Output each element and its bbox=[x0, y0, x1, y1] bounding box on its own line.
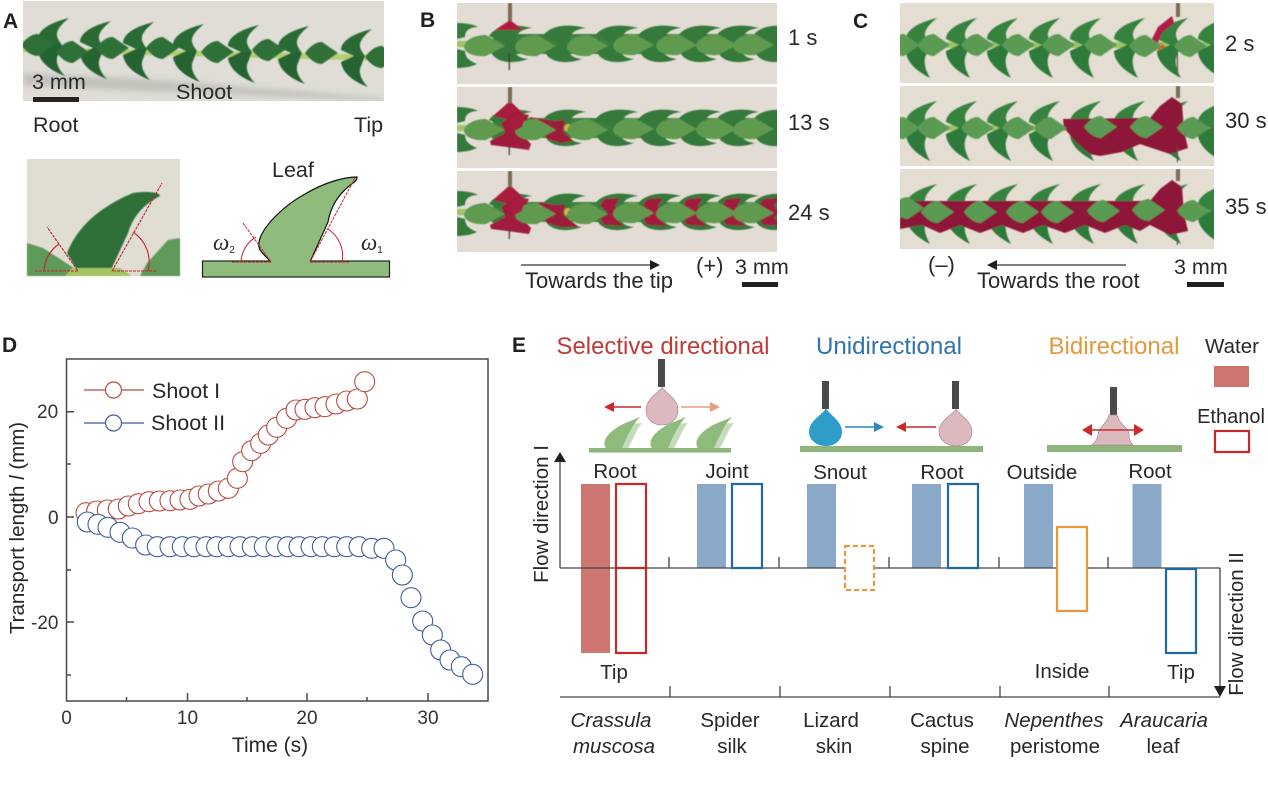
legend: Shoot I: Shoot I bbox=[152, 379, 220, 403]
label: Shoot: Shoot bbox=[176, 80, 232, 104]
label: minus sign: (–) bbox=[928, 252, 955, 277]
panel E: bar chart bbox=[530, 445, 1248, 758]
arrow: salmon right bbox=[681, 402, 720, 412]
category: Araucaria leaf: leaf bbox=[1146, 735, 1180, 758]
heading: Unidirectional: Unidirectional bbox=[816, 333, 962, 360]
label: Root: Root bbox=[33, 113, 78, 137]
bottom labels: Tip bbox=[600, 661, 628, 684]
y tick labels: -20 bbox=[31, 613, 58, 634]
illustration: unidirectional bbox=[800, 381, 983, 452]
panel B frame 24 s bbox=[457, 171, 777, 252]
y tick labels bbox=[31, 402, 59, 634]
panel label C: C bbox=[853, 10, 868, 33]
label: plus sign: (+) bbox=[696, 253, 724, 278]
scale bar bbox=[33, 97, 79, 102]
panel B frame 13 s bbox=[457, 87, 777, 168]
legend: Shoot II bbox=[84, 411, 225, 435]
illustration: bidirectional bbox=[1047, 387, 1182, 452]
x tick labels: 0 bbox=[61, 708, 72, 729]
arrow: flow direction II bbox=[1214, 686, 1226, 697]
category: Lizard skin: skin bbox=[816, 735, 852, 758]
top labels: Root bbox=[920, 461, 964, 484]
category: Crassula muscosa bbox=[571, 709, 655, 758]
category: Cactus spine bbox=[910, 709, 974, 758]
label: Leaf: Leaf bbox=[272, 158, 314, 182]
arrow: flow direction I bbox=[554, 452, 566, 462]
scale bar C bbox=[1187, 282, 1224, 287]
category: Crassula muscosa: muscosa bbox=[573, 735, 655, 758]
category: Cactus spine: spine bbox=[920, 735, 970, 758]
category: Spider silk bbox=[700, 709, 760, 758]
heading: Bidirectional: Bidirectional bbox=[1048, 333, 1180, 360]
illustration: selective directional bbox=[589, 359, 734, 452]
category: Spider silk: silk bbox=[717, 735, 748, 758]
category: Lizard skin bbox=[803, 709, 859, 758]
panel label D: D bbox=[2, 334, 17, 357]
top labels: Joint bbox=[705, 460, 749, 483]
panel C frame 35 s bbox=[900, 169, 1214, 249]
panel label B: B bbox=[420, 9, 435, 32]
axis lines and ticks bbox=[560, 460, 1220, 697]
panel A: leaf angle photo bbox=[27, 159, 180, 276]
legend: Shoot I bbox=[84, 379, 220, 403]
y tick labels: 0 bbox=[48, 508, 59, 529]
panel C frame 2 s bbox=[900, 3, 1214, 83]
panel label E: E bbox=[512, 334, 526, 357]
scale label: 3 mm: 3 mm bbox=[32, 70, 86, 94]
scale bar B bbox=[742, 282, 778, 287]
arrow: towards the tip bbox=[521, 260, 660, 270]
label: 30 s: 30 s bbox=[1225, 108, 1267, 133]
legend: water bbox=[1205, 335, 1259, 387]
x axis title: Time (s) bbox=[232, 734, 308, 757]
panel D: line chart bbox=[6, 359, 488, 757]
category: Lizard skin: Lizard bbox=[803, 709, 859, 732]
arrow: red left bbox=[604, 402, 641, 412]
category: Araucaria leaf bbox=[1118, 709, 1208, 758]
bottom labels: Tip bbox=[1167, 661, 1195, 684]
panel A: leaf schematic bbox=[202, 158, 390, 277]
category: Spider silk: Spider bbox=[700, 709, 760, 732]
label: 13 s: 13 s bbox=[788, 110, 830, 135]
label: Tip: Tip bbox=[354, 113, 383, 137]
category: Nepenthes peristome bbox=[1004, 709, 1104, 758]
scale label B: 3 mm bbox=[735, 255, 789, 279]
top labels: Snout bbox=[813, 461, 867, 484]
category: Crassula muscosa: Crassula bbox=[571, 709, 651, 732]
water bars bbox=[581, 484, 1162, 653]
label: omega 1: 1 bbox=[377, 245, 383, 256]
legend: water: Water bbox=[1205, 335, 1259, 358]
bottom labels bbox=[600, 660, 1195, 684]
label: 2 s: 2 s bbox=[1225, 31, 1254, 56]
arrow: red left bbox=[896, 422, 936, 432]
label: Towards the root: Towards the root bbox=[977, 268, 1140, 293]
series: Shoot I bbox=[76, 372, 375, 523]
panel A: shoot photo bbox=[23, 1, 384, 101]
legend: ethanol bbox=[1197, 406, 1265, 452]
series: Shoot II bbox=[77, 512, 483, 684]
label: Towards the tip: Towards the tip bbox=[525, 268, 673, 293]
label: omega 2: 2 bbox=[229, 245, 235, 256]
category: Nepenthes peristome: Nepenthes bbox=[1004, 709, 1104, 732]
label: 24 s: 24 s bbox=[788, 200, 830, 225]
y tick labels: 20 bbox=[37, 402, 58, 423]
plot frame and ticks bbox=[66, 359, 488, 701]
top labels bbox=[593, 460, 1172, 484]
bottom labels: Inside bbox=[1035, 660, 1089, 683]
x tick labels bbox=[61, 708, 439, 729]
category: Nepenthes peristome: peristome bbox=[1010, 735, 1100, 758]
x tick labels: 20 bbox=[296, 708, 318, 729]
label: omega 2: ω bbox=[213, 230, 229, 255]
heading: Selective directional: Selective directional bbox=[556, 333, 770, 360]
arrow: towards the root bbox=[987, 260, 1126, 270]
axis title: Flow direction I: Flow direction I bbox=[530, 445, 553, 583]
axis title: Flow direction II: Flow direction II bbox=[1225, 552, 1248, 696]
scale label C: 3 mm bbox=[1174, 255, 1228, 279]
panel B frame 1 s bbox=[457, 3, 777, 84]
ethanol bars bbox=[616, 484, 1196, 653]
category: Araucaria leaf: Araucaria bbox=[1118, 709, 1208, 732]
x tick labels: 10 bbox=[177, 708, 198, 729]
arrow: blue right bbox=[845, 422, 884, 432]
label: 35 s: 35 s bbox=[1225, 194, 1267, 219]
panel label A: A bbox=[3, 10, 18, 33]
panel C frame 30 s bbox=[900, 86, 1214, 166]
label: 1 s: 1 s bbox=[788, 25, 817, 50]
top labels: Root bbox=[1128, 460, 1172, 483]
top labels: Root bbox=[593, 460, 637, 483]
top labels: Outside bbox=[1007, 461, 1077, 484]
legend: ethanol: Ethanol bbox=[1197, 406, 1265, 428]
category: Cactus spine: Cactus bbox=[910, 709, 974, 732]
x tick labels: 30 bbox=[417, 708, 439, 729]
label: omega 1: ω bbox=[361, 230, 377, 255]
y axis title: Transport length l (mm) bbox=[6, 422, 29, 634]
legend: Shoot II: Shoot II bbox=[151, 411, 225, 435]
arrow: red double bbox=[1082, 424, 1144, 436]
